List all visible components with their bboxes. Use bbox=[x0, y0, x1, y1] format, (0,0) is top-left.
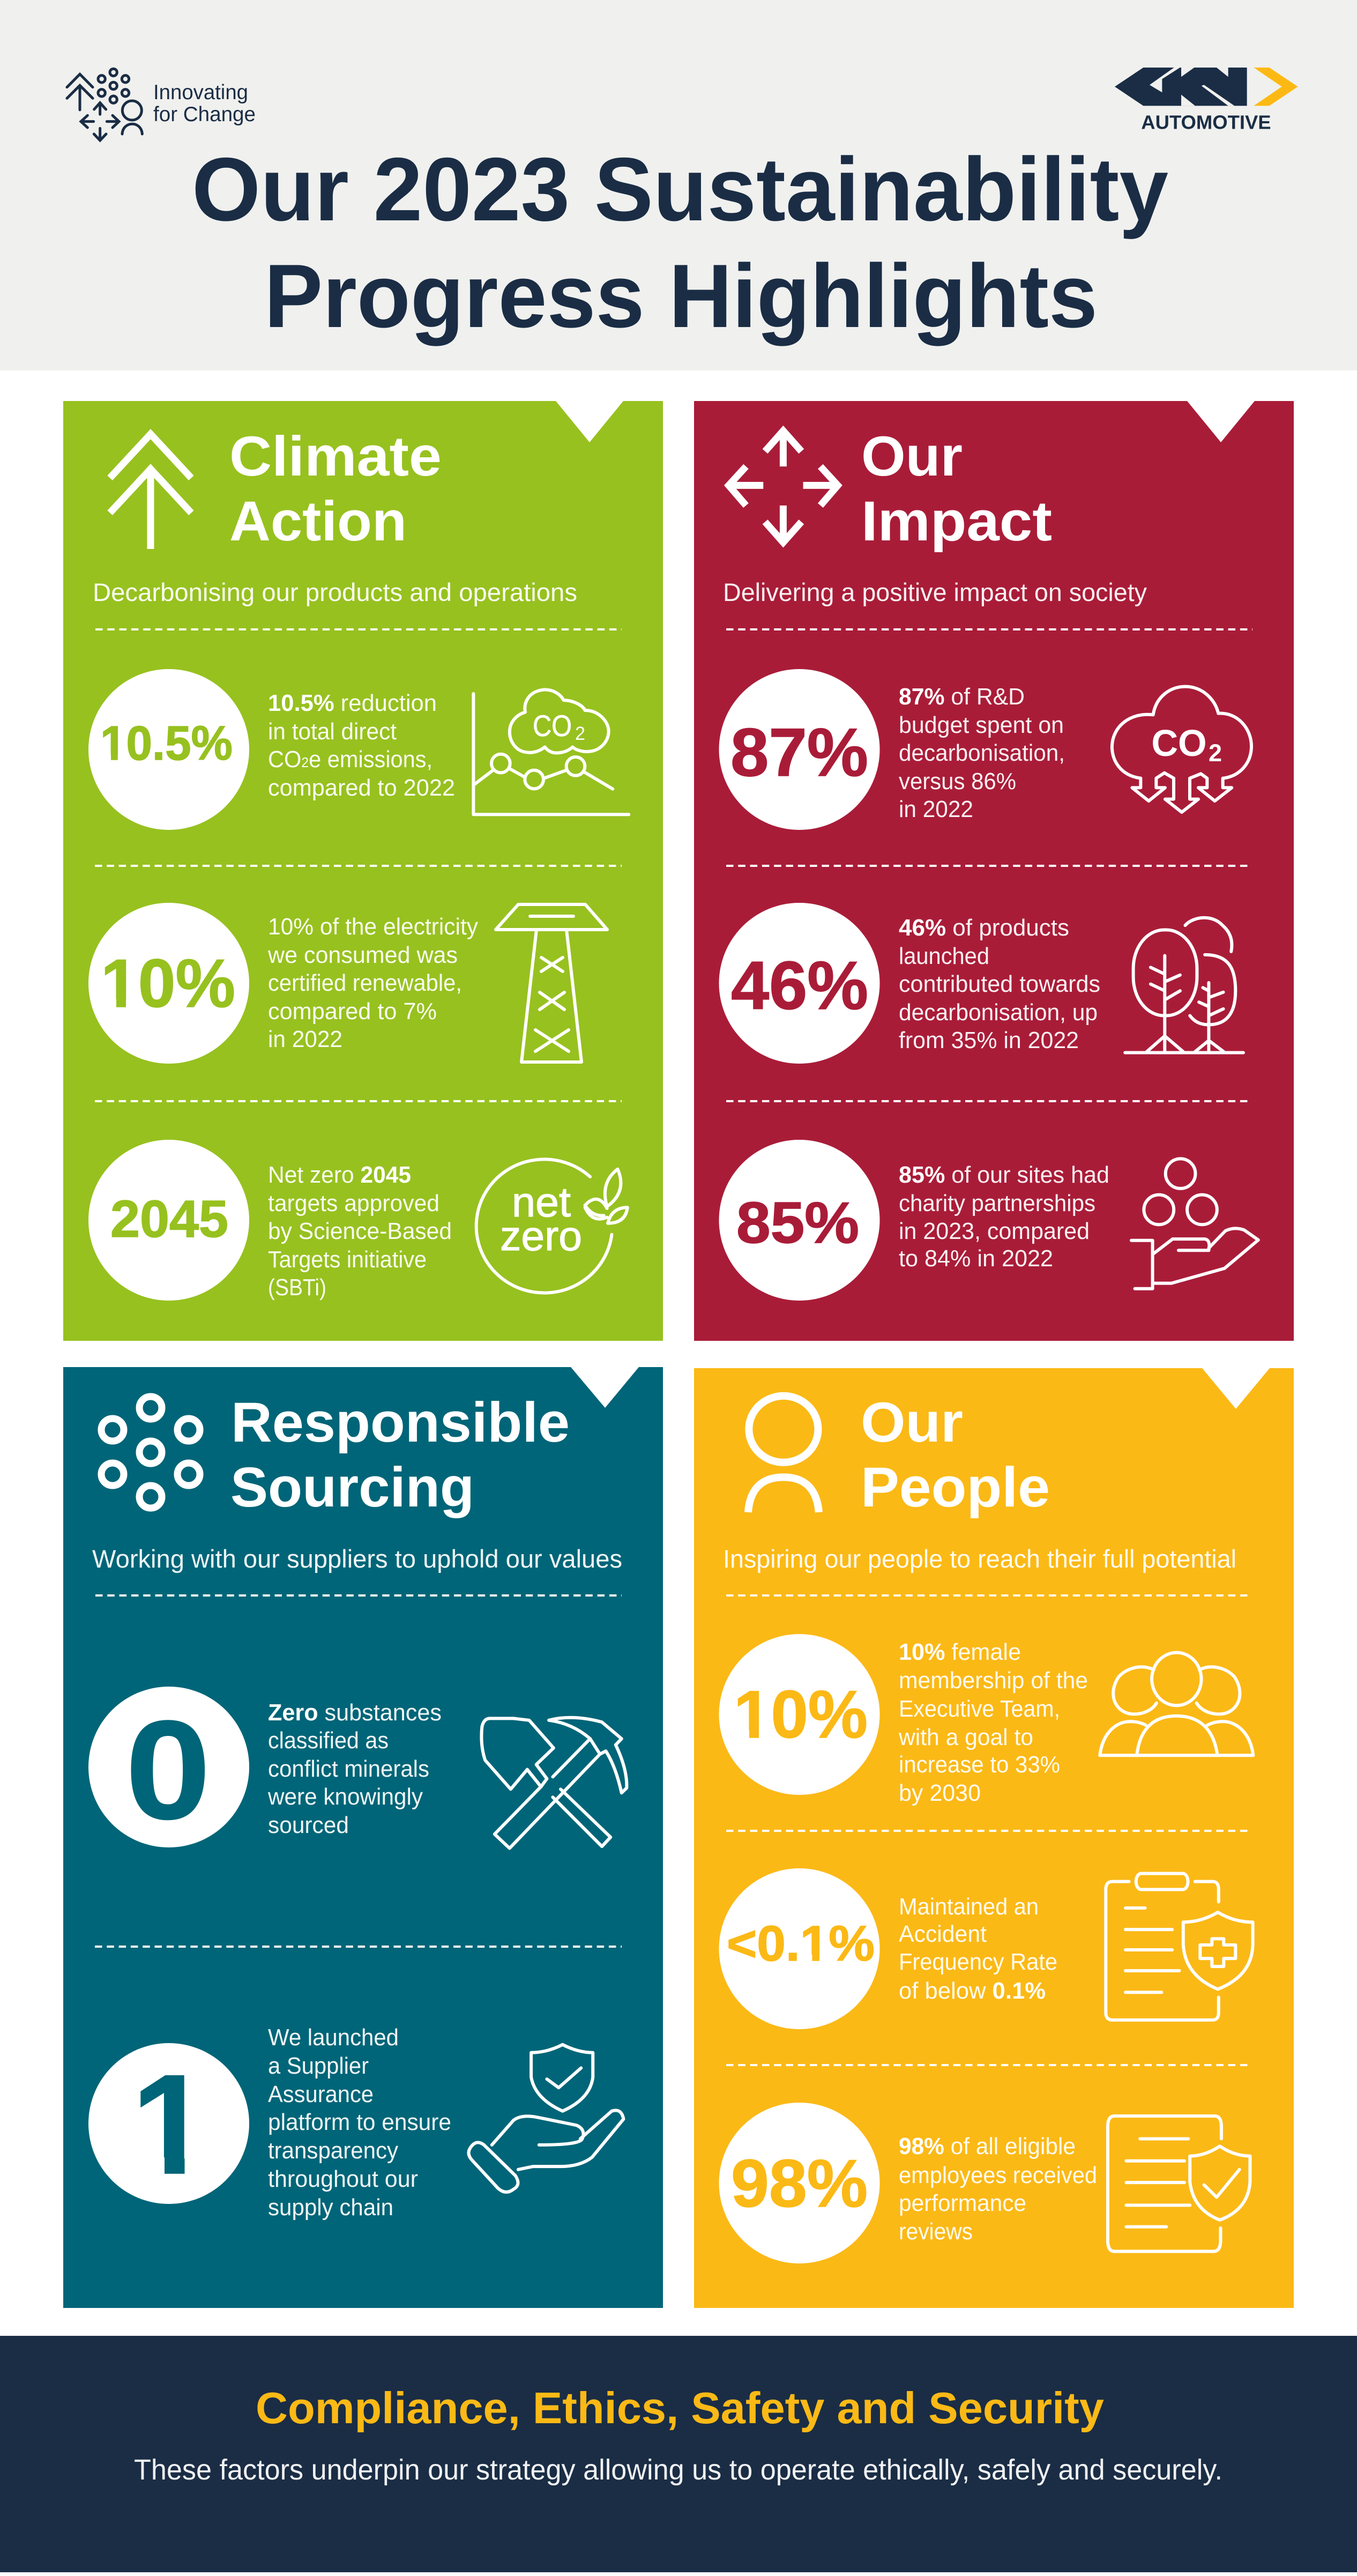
icon: shovel and pickaxe bbox=[481, 1718, 627, 1849]
icon: four arrows bbox=[729, 431, 838, 543]
icon: innovating for change emblem bbox=[67, 69, 142, 140]
text: products launched: decarbonisation, up bbox=[899, 1000, 1098, 1026]
stat: 10% bbox=[719, 1634, 880, 1795]
text: accident frequency: Maintained an bbox=[899, 1894, 1039, 1920]
title bbox=[192, 139, 1168, 346]
icon: hand with coins bbox=[1131, 1159, 1258, 1289]
text: emissions reduction bbox=[268, 691, 455, 801]
stat: 2045: 2045 bbox=[110, 1190, 228, 1248]
stat: 85% bbox=[719, 1140, 880, 1301]
icon: hand with shield bbox=[468, 2045, 623, 2192]
text: accident frequency: Accident bbox=[899, 1921, 987, 1947]
text: performance reviews: 98% of all eligible bbox=[899, 2134, 1076, 2159]
icon: CO2 cloud with down arrows bbox=[1112, 687, 1251, 812]
text: conflict minerals: classified as bbox=[268, 1728, 389, 1754]
panel: responsible sourcing bbox=[63, 1367, 663, 2308]
text: female membership: by 2030 bbox=[899, 1780, 981, 1806]
text: emissions reduction: compared to 2022 bbox=[268, 775, 455, 801]
stat: 10%: 10% bbox=[734, 1677, 868, 1752]
icon: clipboard with shield bbox=[1106, 1874, 1253, 2020]
text: R&D budget: decarbonisation, bbox=[899, 740, 1065, 766]
icon: CO2 cloud with down arrows: CO bbox=[1151, 722, 1207, 764]
icon: document with shield bbox=[1108, 2116, 1250, 2252]
logo text: innovating for change bbox=[153, 81, 256, 126]
text: performance reviews bbox=[899, 2134, 1097, 2245]
text: conflict minerals: Zero substances bbox=[268, 1700, 442, 1726]
text: female membership: with a goal to bbox=[898, 1725, 1033, 1750]
text: performance reviews: reviews bbox=[899, 2219, 973, 2245]
heading: climate action: Action bbox=[229, 490, 407, 553]
text: R&D budget: 87% of R&D bbox=[899, 684, 1025, 710]
text: conflict minerals: were knowingly bbox=[267, 1784, 423, 1810]
text: charity partnerships: in 2023, compared bbox=[899, 1219, 1090, 1244]
subtitle: Inspiring our people to reach their full potential bbox=[723, 1545, 1236, 1573]
text: charity partnerships: 85% of our sites had bbox=[899, 1162, 1109, 1188]
heading: our people: Our bbox=[861, 1391, 963, 1454]
text: female membership: membership of the bbox=[899, 1668, 1088, 1694]
stat: 98%: 98% bbox=[731, 2147, 868, 2221]
stat: 2045 bbox=[88, 1140, 249, 1301]
stat: 98% bbox=[719, 2103, 880, 2263]
stat: 0: 0 bbox=[125, 1691, 211, 1849]
heading: our impact bbox=[861, 425, 1052, 553]
icon label: CO2: 2 bbox=[575, 723, 585, 744]
panel: climate action bbox=[63, 401, 663, 1341]
stat: 87% bbox=[719, 669, 880, 830]
text: products launched: contributed towards bbox=[899, 971, 1100, 997]
heading: responsible sourcing: Responsible bbox=[231, 1391, 570, 1454]
text: emissions reduction: CO2e emissions, bbox=[268, 747, 433, 773]
text: net zero target: (SBTi) bbox=[268, 1275, 326, 1301]
title: Our 2023 Sustainability bbox=[192, 139, 1168, 240]
heading: climate action: Climate bbox=[229, 425, 442, 488]
text: products launched: 46% of products bbox=[899, 915, 1069, 941]
text: net zero target: targets approved bbox=[268, 1191, 439, 1216]
stat: 1: 1 bbox=[131, 2045, 210, 2204]
text: charity partnerships: charity partnerships bbox=[899, 1191, 1095, 1216]
text: R&D budget: versus 86% bbox=[899, 769, 1016, 795]
icon: CO2 cloud with down arrows: 2 bbox=[1209, 739, 1222, 767]
text: electricity: in 2022 bbox=[268, 1027, 342, 1052]
icon: CO2 chart bbox=[473, 690, 629, 814]
icon: seven rings bbox=[101, 1397, 200, 1508]
text: conflict minerals: conflict minerals bbox=[268, 1756, 429, 1782]
stat: 10% bbox=[88, 903, 249, 1064]
text: supplier assurance: Assurance bbox=[268, 2082, 374, 2107]
header band bbox=[0, 0, 1357, 370]
icon: pylon bbox=[496, 904, 607, 1062]
stat: 10%: 10% bbox=[101, 945, 235, 1021]
panel: our people bbox=[694, 1368, 1294, 2308]
heading: our people: People bbox=[861, 1456, 1050, 1519]
stat: 46% bbox=[719, 903, 880, 1064]
footer text: These factors underpin our strategy allowing us to operate ethically, safely and securely. bbox=[134, 2454, 1222, 2486]
text: electricity: compared to 7% bbox=[268, 999, 437, 1025]
text: emissions reduction: 10.5% reduction bbox=[268, 691, 437, 716]
text: performance reviews: employees received bbox=[899, 2163, 1097, 2188]
heading: our impact: Impact bbox=[861, 490, 1052, 553]
text: R&D budget: budget spent on bbox=[899, 712, 1064, 738]
text: supplier assurance: supply chain bbox=[268, 2195, 393, 2221]
text: supplier assurance: transparency bbox=[268, 2138, 398, 2164]
logo: GKN Automotive bbox=[1115, 68, 1298, 133]
text: electricity: we consumed was bbox=[267, 942, 458, 968]
stat: 87%: 87% bbox=[730, 714, 868, 790]
text: products launched: launched bbox=[899, 944, 989, 969]
text: R&D budget: in 2022 bbox=[899, 797, 973, 822]
text: charity partnerships: to 84% in 2022 bbox=[899, 1246, 1053, 1272]
text: female membership bbox=[898, 1639, 1088, 1806]
heading: climate action bbox=[229, 425, 442, 553]
text: net zero target: by Science-Based bbox=[268, 1219, 452, 1244]
heading: responsible sourcing bbox=[230, 1391, 570, 1519]
text: female membership: increase to 33% bbox=[899, 1752, 1060, 1778]
text: conflict minerals: sourced bbox=[268, 1813, 349, 1838]
text: charity partnerships bbox=[899, 1162, 1109, 1272]
stat: <0.1% bbox=[719, 1868, 880, 2029]
text: conflict minerals bbox=[267, 1700, 442, 1838]
text: supplier assurance: throughout our bbox=[268, 2166, 418, 2192]
text: net zero target: Net zero 2045 bbox=[268, 1162, 411, 1188]
title: Progress Highlights bbox=[264, 246, 1098, 346]
stat: 85%: 85% bbox=[736, 1190, 859, 1256]
stat: <0.1%: <0.1% bbox=[727, 1916, 875, 1971]
footer band bbox=[0, 2336, 1357, 2572]
text: performance reviews: performance bbox=[899, 2191, 1026, 2216]
text: accident frequency: of below 0.1% bbox=[899, 1978, 1046, 2004]
text: accident frequency bbox=[899, 1894, 1057, 2004]
icon: team bbox=[1100, 1653, 1253, 1755]
text: net zero target: Targets initiative bbox=[268, 1247, 427, 1273]
stat: 10.5% bbox=[88, 669, 249, 830]
stat: 0 bbox=[88, 1687, 249, 1849]
text: female membership: 10% female bbox=[899, 1639, 1021, 1665]
heading: our impact: Our bbox=[861, 425, 963, 488]
text: emissions reduction: in total direct bbox=[268, 719, 397, 745]
text: supplier assurance: a Supplier bbox=[268, 2053, 369, 2079]
text: electricity bbox=[267, 914, 478, 1052]
icon label: CO2: CO bbox=[533, 709, 572, 743]
logo: GKN Automotive: AUTOMOTIVE bbox=[1141, 112, 1271, 133]
text: supplier assurance: platform to ensure bbox=[268, 2110, 451, 2135]
text: female membership: Executive Team, bbox=[899, 1696, 1060, 1722]
subtitle: Delivering a positive impact on society bbox=[723, 578, 1147, 606]
subtitle: Decarbonising our products and operations bbox=[93, 578, 577, 606]
heading: our people bbox=[861, 1391, 1050, 1519]
panel: our impact bbox=[694, 401, 1294, 1341]
icon: person bbox=[748, 1396, 819, 1512]
text: R&D budget bbox=[899, 684, 1065, 822]
logo text: innovating for change: Innovating bbox=[153, 81, 248, 104]
stat: 46%: 46% bbox=[731, 947, 868, 1023]
logo text: innovating for change: for Change bbox=[153, 103, 256, 126]
icon: trees bbox=[1125, 918, 1243, 1053]
icon: trees arrow bbox=[110, 434, 191, 549]
text: products launched: from 35% in 2022 bbox=[899, 1028, 1079, 1053]
text: accident frequency: Frequency Rate bbox=[899, 1949, 1057, 1975]
heading: responsible sourcing: Sourcing bbox=[230, 1456, 474, 1519]
stat: 1 bbox=[88, 2043, 249, 2204]
icon: net zero bbox=[476, 1159, 628, 1293]
footer heading: Compliance, Ethics, Safety and Security bbox=[256, 2383, 1104, 2433]
stat: 10.5%: 10.5% bbox=[100, 717, 233, 770]
text: electricity: certified renewable, bbox=[268, 970, 462, 996]
icon: net zero: net bbox=[512, 1178, 571, 1226]
text: products launched bbox=[899, 915, 1100, 1053]
text: net zero target bbox=[268, 1162, 452, 1301]
icon: net zero: zero bbox=[500, 1212, 582, 1259]
text: supplier assurance: We launched bbox=[268, 2025, 399, 2051]
text: electricity: 10% of the electricity bbox=[268, 914, 478, 940]
text: supplier assurance bbox=[268, 2025, 451, 2221]
subtitle: Working with our suppliers to uphold our values bbox=[92, 1545, 622, 1573]
